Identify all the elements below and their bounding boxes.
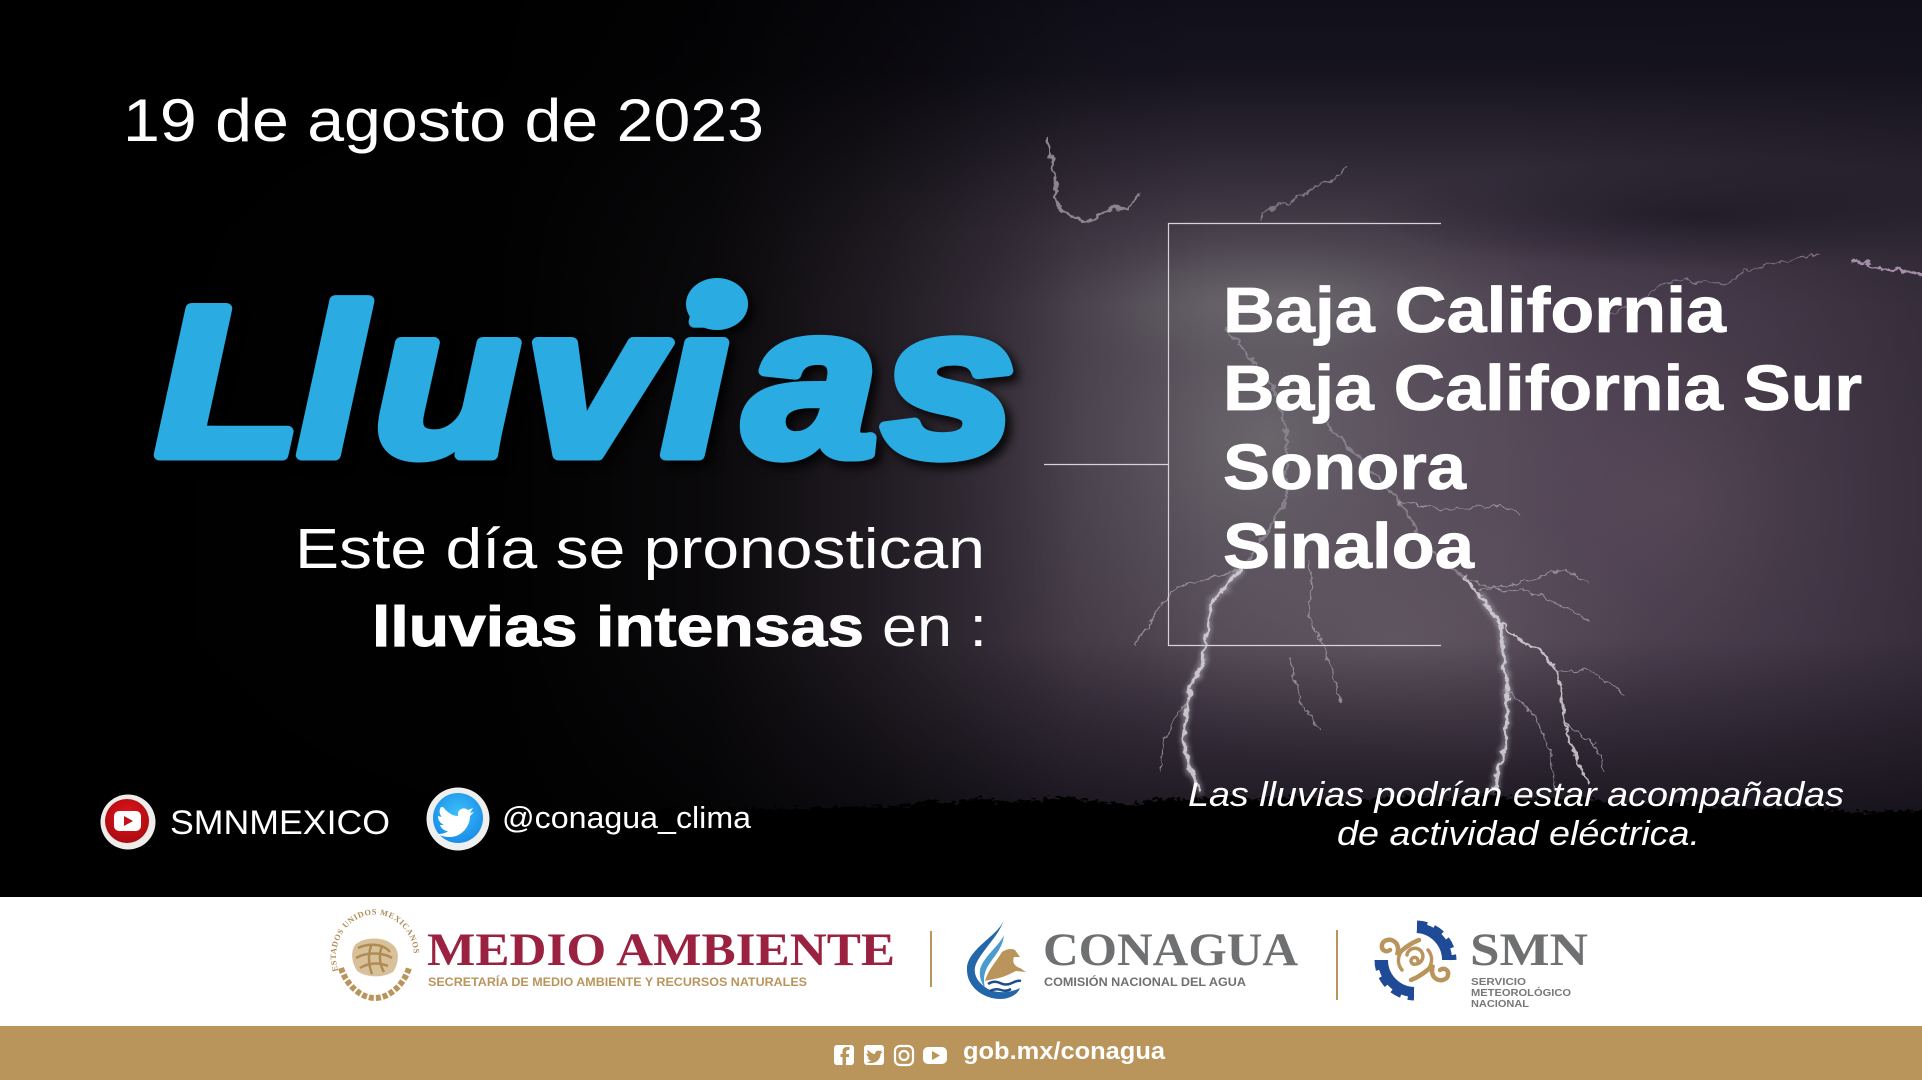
- date heading: 19 de agosto de 2023: [123, 87, 764, 154]
- note line 2: de actividad eléctrica.: [1337, 815, 1700, 853]
- Medio Ambiente wordmark: MEDIO AMBIENTE: [427, 924, 895, 976]
- Conagua wordmark: CONAGUA: [1043, 924, 1298, 976]
- icon: SMN gear and spiral: [1378, 924, 1453, 997]
- SMN subtitle: [1471, 977, 1571, 1010]
- state: Sonora: [1223, 431, 1466, 503]
- icon: Conagua drop: [967, 919, 1026, 999]
- website: gob.mx/conagua: [963, 1038, 1166, 1065]
- SMN wordmark: SMN: [1470, 924, 1588, 976]
- secretaría subtitle: SECRETARÍA DE MEDIO AMBIENTE Y RECURSOS NATURALES: [428, 976, 807, 989]
- states list: [1223, 274, 1862, 582]
- logo: Medio Ambiente: [330, 909, 895, 1001]
- icon: youtube: [923, 1047, 947, 1064]
- forecast line 1: Este día se pronostican: [295, 517, 985, 581]
- icon: facebook: [834, 1045, 854, 1065]
- electrical activity note: [1188, 776, 1844, 853]
- note line 1: Las lluvias podrían estar acompañadas: [1188, 776, 1844, 814]
- Conagua subtitle: COMISIÓN NACIONAL DEL AGUA: [1044, 976, 1246, 989]
- forecast line 2 bold: lluvias intensas: [372, 595, 864, 659]
- social: youtube: [100, 794, 390, 850]
- logo: SMN: [1378, 924, 1588, 1010]
- icon: lightning bolts: [1047, 140, 1922, 790]
- title word: Lluvias: [156, 262, 1015, 500]
- icon: twitter: [426, 788, 490, 850]
- divider: [930, 931, 932, 987]
- i dot: [686, 278, 748, 330]
- subtitle line: NACIONAL: [1471, 999, 1529, 1010]
- icon: instagram: [895, 1046, 913, 1065]
- forecast text: [295, 517, 987, 659]
- state: Baja California Sur: [1223, 352, 1862, 424]
- state: Baja California: [1223, 274, 1726, 346]
- icon: national seal: [330, 909, 420, 1001]
- icon: youtube: [100, 794, 156, 850]
- title: Lluvias: [156, 262, 1015, 500]
- social: twitter: [426, 788, 752, 850]
- logo: Conagua: [967, 919, 1298, 999]
- logo band: [0, 897, 1922, 1026]
- youtube handle: SMNMEXICO: [170, 804, 390, 842]
- divider: [1336, 930, 1338, 1000]
- subtitle line: SERVICIO: [1471, 977, 1526, 988]
- icon: national seal: ESTADOS UNIDOS MEXICANOS: [330, 909, 420, 972]
- subtitle line: METEOROLÓGICO: [1471, 986, 1571, 999]
- footer bar: [0, 1026, 1922, 1080]
- ground silhouette: [0, 794, 1922, 920]
- state: Sinaloa: [1223, 510, 1474, 582]
- icon: twitter: [864, 1045, 884, 1065]
- twitter handle: @conagua_clima: [502, 800, 752, 835]
- bracket lines: [1044, 224, 1441, 646]
- forecast line 2 end: en :: [882, 595, 987, 659]
